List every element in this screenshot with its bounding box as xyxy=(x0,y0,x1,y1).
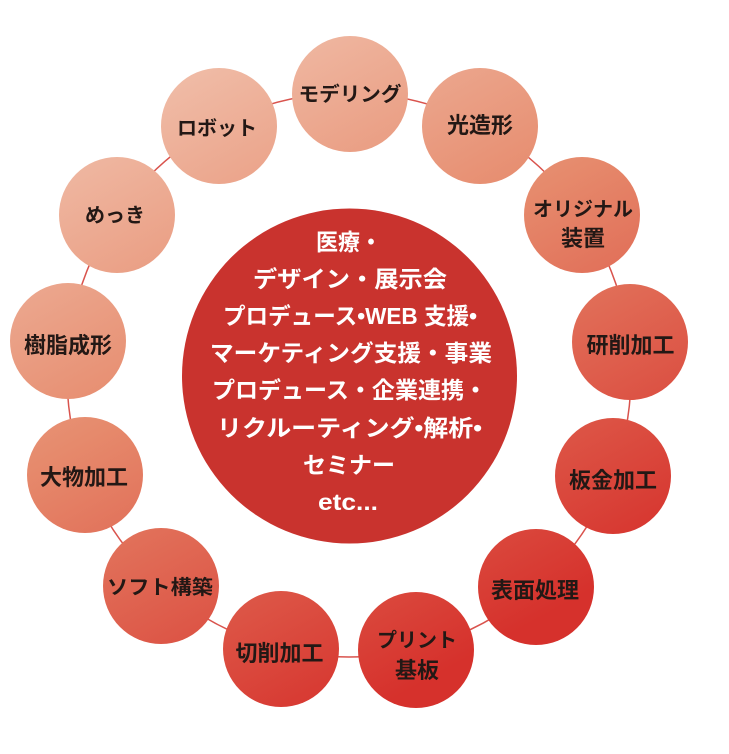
node: 板金加工 xyxy=(555,418,671,534)
node: プリント基板: プリント xyxy=(377,629,457,652)
node: めっき xyxy=(59,157,175,273)
node: プリント基板: 基板 xyxy=(395,658,439,683)
node: モデリング xyxy=(292,36,408,152)
center text: セミナー xyxy=(303,452,395,478)
node: モデリング: モデリング xyxy=(298,82,402,106)
node: 大物加工: 大物加工 xyxy=(40,465,128,490)
center text: etc... xyxy=(318,489,378,515)
node: 樹脂成形: 樹脂成形 xyxy=(24,333,112,358)
center text: 医療・ xyxy=(316,229,382,255)
node: 大物加工 xyxy=(27,417,143,533)
node: 切削加工 xyxy=(223,591,339,707)
node: ソフト構築 xyxy=(103,528,219,644)
center text: マーケティング支援・事業 xyxy=(210,340,492,366)
center circle xyxy=(182,208,517,544)
center text: リクルーティング•解析• xyxy=(217,415,482,441)
node: 研削加工: 研削加工 xyxy=(586,333,675,358)
node: 研削加工 xyxy=(572,284,688,400)
node: 光造形 xyxy=(422,68,538,184)
node: 板金加工: 板金加工 xyxy=(569,468,657,493)
node: ロボット: ロボット xyxy=(177,117,257,140)
node: 表面処理 xyxy=(478,529,594,645)
center text: デザイン・展示会 xyxy=(253,266,447,292)
node: 樹脂成形 xyxy=(10,283,126,399)
node: オリジナル装置: 装置 xyxy=(561,226,605,251)
node: 光造形: 光造形 xyxy=(447,113,513,138)
node: ソフト構築: ソフト構築 xyxy=(107,576,213,599)
node: オリジナル装置: オリジナル xyxy=(533,199,633,221)
connecting ring xyxy=(67,93,631,657)
node: ロボット xyxy=(161,68,277,184)
node: めっき: めっき xyxy=(85,204,145,227)
node: 切削加工: 切削加工 xyxy=(235,641,324,666)
node: プリント基板 xyxy=(358,592,474,708)
node: オリジナル装置 xyxy=(524,157,640,273)
node: 表面処理: 表面処理 xyxy=(491,578,579,603)
center text: プロデュース•WEB 支援• xyxy=(223,303,477,329)
center text: プロデュース・企業連携・ xyxy=(212,377,487,403)
center text xyxy=(210,229,492,515)
